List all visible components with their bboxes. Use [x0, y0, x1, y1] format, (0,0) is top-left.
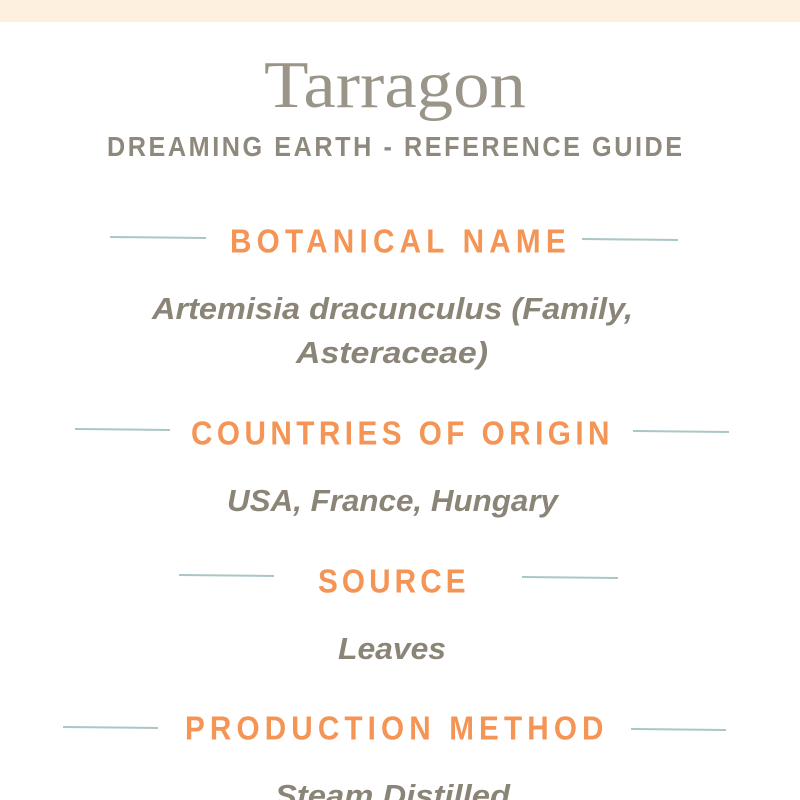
heading: botanical name: BOTANICAL NAME [230, 223, 566, 260]
text: botanical name value [151, 292, 633, 370]
heading: source: SOURCE [318, 563, 466, 600]
title: Tarragon [264, 48, 526, 122]
subtitle: DREAMING EARTH - REFERENCE GUIDE [107, 131, 682, 162]
text: source value: Leaves [338, 632, 446, 666]
heading: countries of origin: COUNTRIES OF ORIGIN [191, 415, 610, 452]
heading: production method: PRODUCTION METHOD [185, 710, 604, 747]
text: botanical name value: Artemisia dracunculus (Family, [151, 292, 633, 326]
text: countries value: USA, France, Hungary [227, 484, 560, 518]
text: botanical name value: Asteraceae) [295, 336, 488, 370]
top cream band [0, 0, 800, 22]
